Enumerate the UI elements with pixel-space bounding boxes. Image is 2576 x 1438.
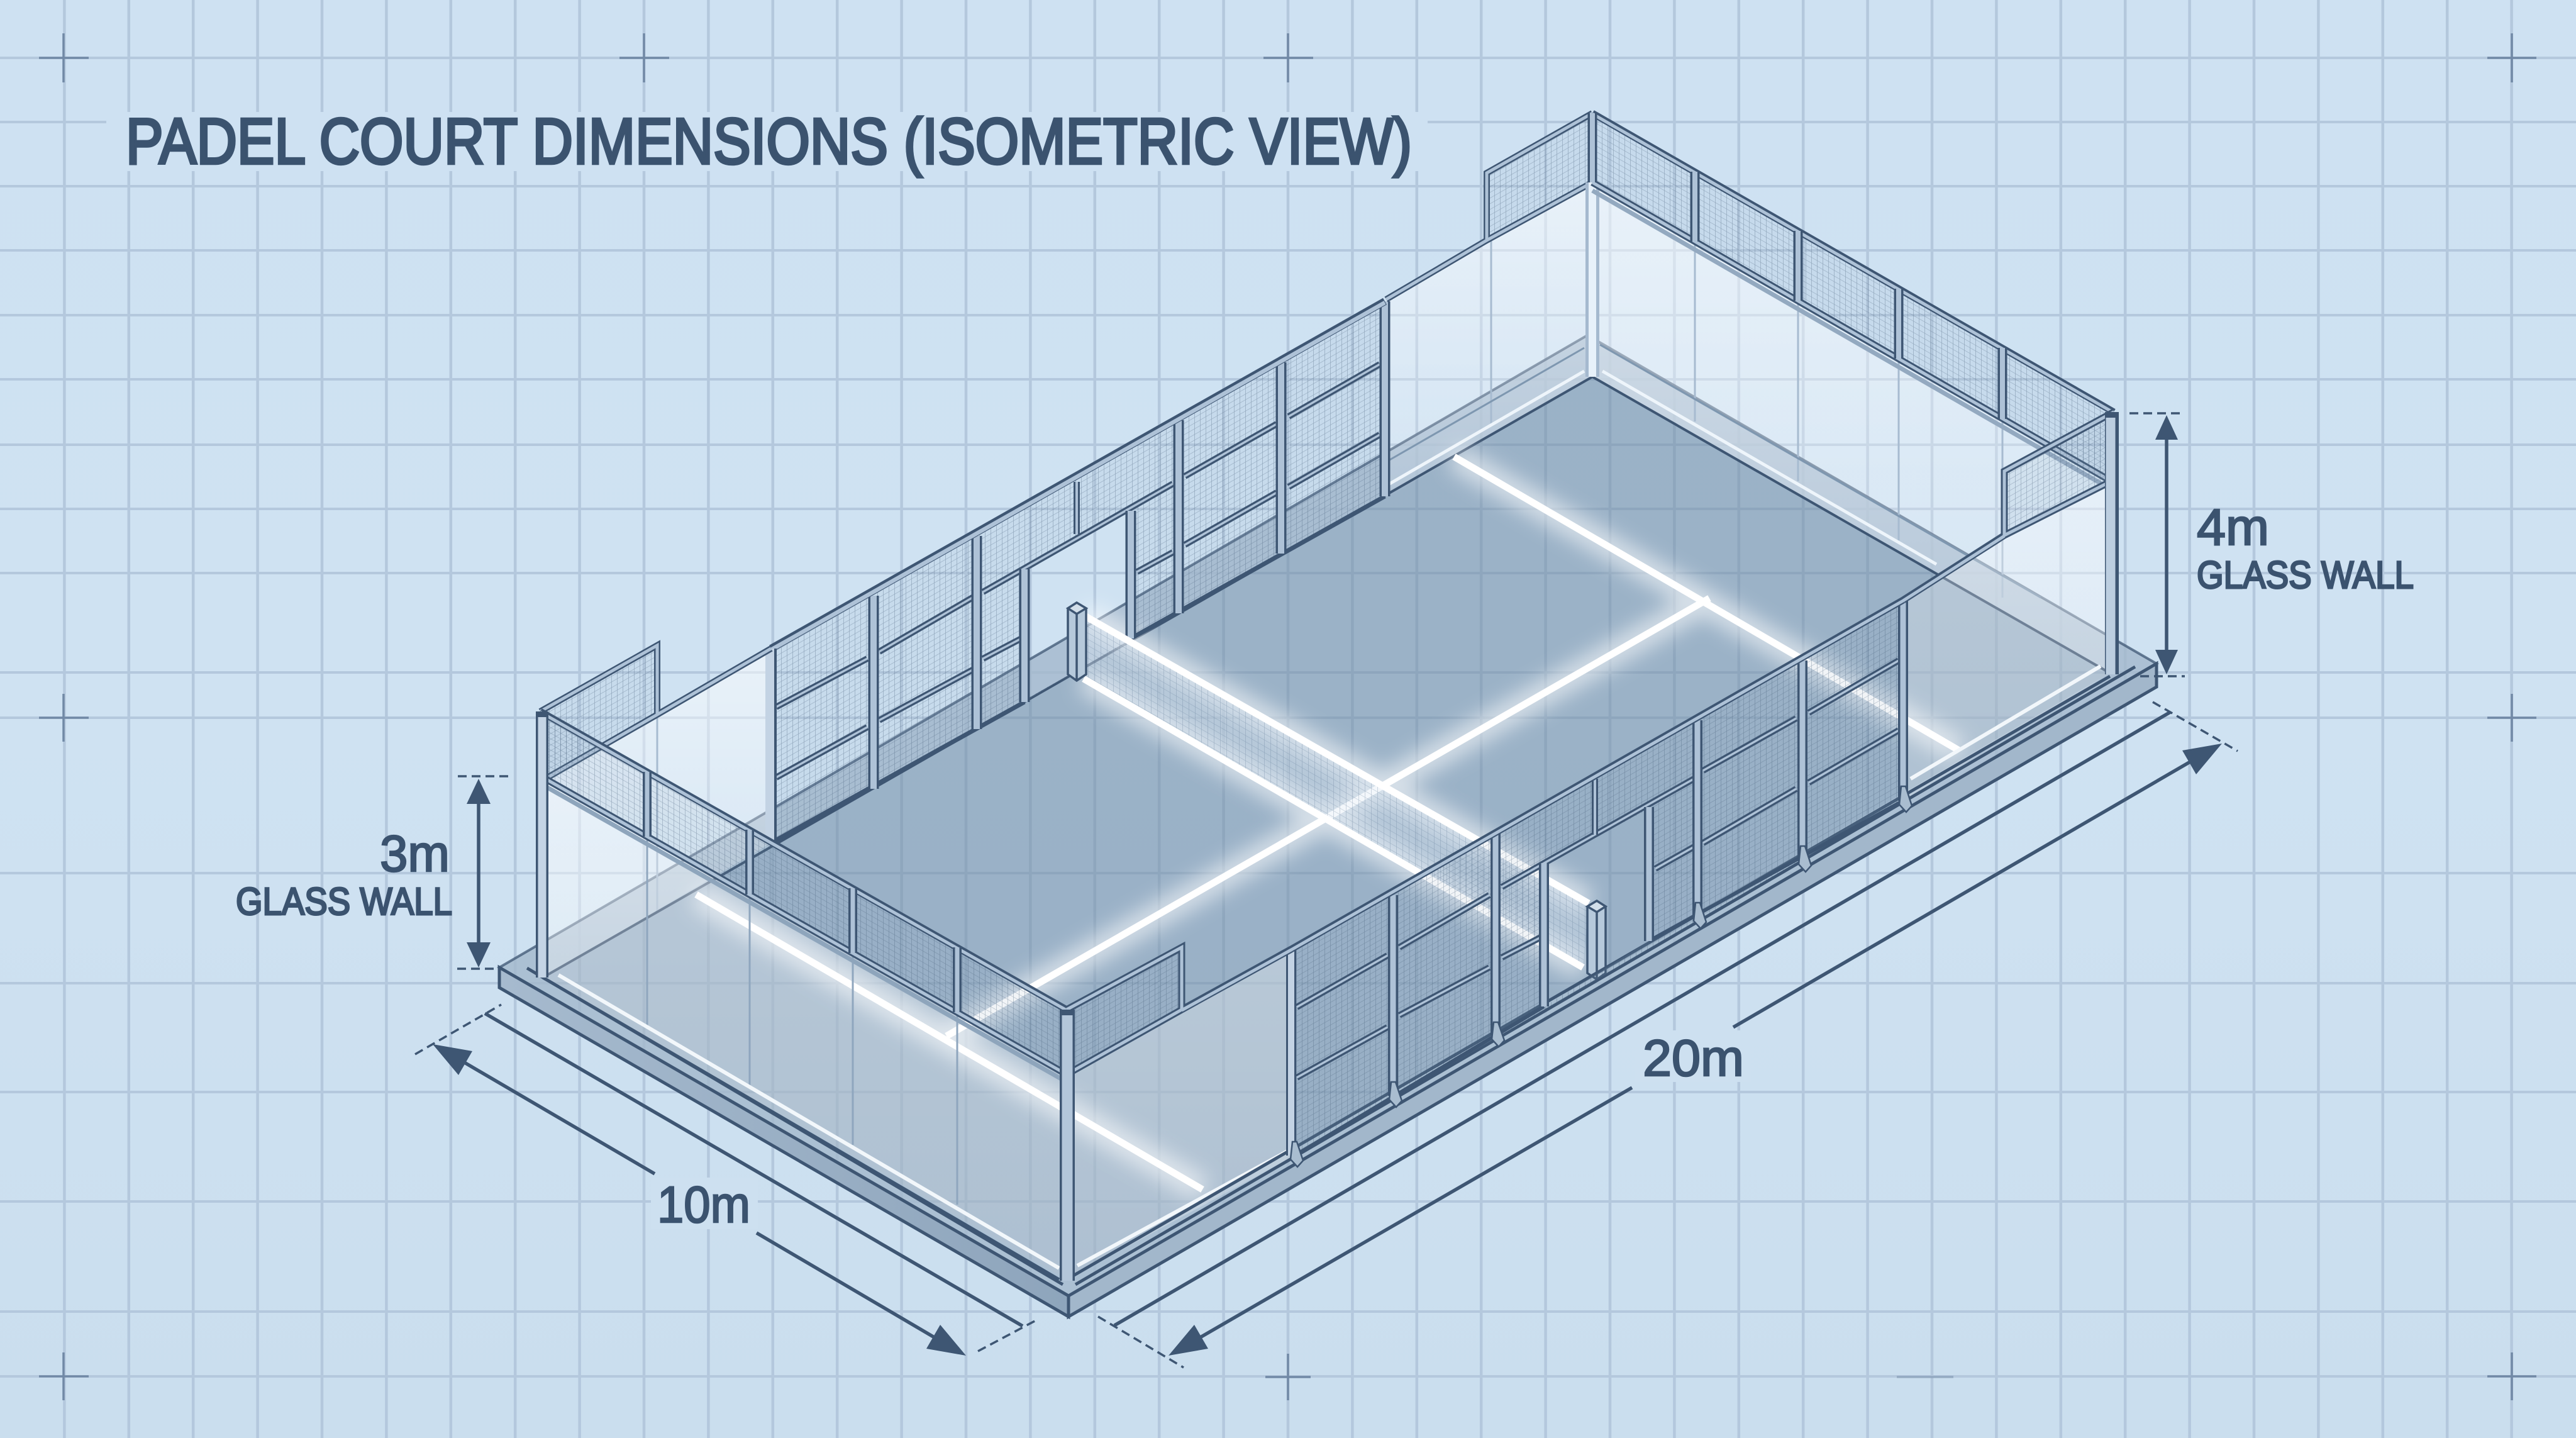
- door lintel post highlight: [1594, 779, 1596, 835]
- 10m value background: [651, 1178, 758, 1229]
- front-left sill lines: [558, 975, 1059, 1268]
- left corner pillar: [536, 711, 548, 978]
- glass post edge: [774, 649, 777, 843]
- end wall posts dark: [1592, 113, 2002, 419]
- far net post: [1068, 603, 1086, 681]
- long wall frame dark: [1297, 660, 1899, 1078]
- front corner pillar: [1060, 1010, 1075, 1281]
- glass panel divider lines: [657, 240, 2002, 912]
- far fence posts highlights: [874, 301, 1385, 789]
- service and centre lines: [696, 457, 1959, 1190]
- 4m extension lines: [2129, 413, 2185, 676]
- long wall sill white lines: [1077, 666, 2101, 1266]
- right corner pillar face: [2106, 418, 2116, 674]
- far fence frame dark: [776, 364, 1380, 778]
- back glass walls: [543, 182, 2111, 978]
- glass: back-left wall near apex: [1386, 182, 1592, 499]
- far fence top rail: [771, 301, 1385, 649]
- long wall top rails dark: [1067, 412, 2114, 1074]
- 10m arrow: [433, 1044, 966, 1356]
- long wall sill dark line: [1067, 667, 2135, 1285]
- far fence top rail highlight: [771, 303, 1385, 650]
- front-left mesh: [540, 711, 1067, 1074]
- front-left glass divider lines: [647, 837, 957, 1205]
- 3m extension lines: [457, 776, 513, 969]
- long wall mesh: [1291, 600, 1903, 1156]
- net mesh: [1084, 615, 1589, 967]
- back-left wall mesh fence: [770, 301, 1385, 843]
- front-left frame dark: [540, 711, 1067, 1074]
- dimension: 10m width: [415, 1005, 1038, 1356]
- 3m label: GLASS WALL: [236, 880, 452, 923]
- glass post at left of fence: [765, 649, 774, 843]
- front-left rail shadow: [545, 786, 1067, 1082]
- end wall frame dark: [1592, 113, 2114, 481]
- post feet: [1291, 786, 1912, 1167]
- far fence bottom rail: [771, 496, 1385, 843]
- platform right side face: [1069, 664, 2157, 1317]
- platform top outline: [499, 335, 2157, 1296]
- 20m value: 20m: [1643, 1030, 1744, 1087]
- long wall posts dark: [1291, 600, 1903, 1156]
- pale apex glass pillar highlight: [1589, 182, 1596, 377]
- title background knock-out: [106, 112, 1428, 171]
- end rails dark: [540, 113, 1592, 779]
- net top and base lines: [1084, 615, 1589, 967]
- front-left sill dark line: [527, 968, 1063, 1285]
- front-left posts highlight: [647, 772, 957, 1012]
- far fence frame highlights: [776, 364, 1380, 778]
- front corner pillar face: [1062, 1015, 1073, 1281]
- 3m double arrow: [467, 779, 491, 967]
- tennis net: [1068, 603, 1589, 967]
- long wall mesh wing near front corner: [1067, 947, 1182, 1074]
- front-left frame highlight: [540, 712, 1067, 1074]
- back-left wall end sections: [540, 113, 1592, 779]
- title: PADEL COURT DIMENSIONS (ISOMETRIC VIEW): [126, 105, 1412, 177]
- glass: back-left wall near left corner: [543, 649, 771, 978]
- platform left side face: [499, 967, 1069, 1317]
- left corner pillar face: [538, 717, 546, 978]
- end wall posts highlight: [1592, 113, 2002, 419]
- end wall mesh: [1592, 113, 2114, 481]
- far fence posts dark: [874, 301, 1385, 789]
- door lintel post highlight: [1075, 482, 1078, 534]
- front-left posts dark: [647, 772, 957, 1012]
- end wall frame highlight: [1592, 114, 2114, 481]
- right corner pillar: [2105, 412, 2119, 674]
- 10m reference line: [485, 1013, 1023, 1326]
- floor edge lines: [543, 345, 2110, 978]
- front-right long wall: [1067, 412, 2135, 1285]
- dimension: 3m height: [236, 776, 513, 969]
- end rails highlight: [540, 113, 1592, 779]
- corner pillars: [542, 412, 2112, 1281]
- front-left glass panel: [543, 779, 1067, 1279]
- dimension: 20m length: [1098, 702, 2238, 1368]
- mesh wing at left corner: [540, 645, 657, 779]
- far glass section: [1903, 481, 2111, 801]
- long wall mesh wing near right corner: [2004, 412, 2114, 535]
- 20m extension lines: [1098, 702, 2238, 1368]
- 4m double arrow: [2155, 415, 2178, 674]
- court lines: [696, 457, 1959, 1190]
- 4m value: 4m: [2197, 499, 2269, 556]
- dimension: 4m height: [2129, 413, 2414, 676]
- 20m value background: [1635, 1030, 1751, 1082]
- back-right end wall mesh: [1592, 113, 2114, 489]
- court floor: [543, 377, 2110, 1279]
- 10m extension lines: [415, 1005, 1038, 1351]
- court line glow: [696, 457, 1959, 1190]
- long wall bottom rail: [1295, 801, 1903, 1156]
- near glass section: [1067, 949, 1295, 1279]
- fence mesh: [771, 301, 1385, 843]
- 3m value: 3m: [380, 825, 450, 883]
- glass: back-right end wall: [1592, 182, 2111, 673]
- near net post: [1587, 901, 1606, 979]
- 20m reference line: [1114, 712, 2170, 1325]
- 20m arrow: [1169, 744, 2222, 1356]
- 10m value: 10m: [657, 1176, 750, 1234]
- long wall top rails highlight: [1067, 412, 2114, 1074]
- glass post at near end of fence: [1288, 950, 1294, 1156]
- platform top surface: [499, 335, 2157, 1296]
- front-left end wall: [527, 711, 1067, 1285]
- base platform: [499, 335, 2157, 1317]
- pale apex glass pillar: [1585, 182, 1599, 377]
- 4m label: GLASS WALL: [2197, 554, 2414, 596]
- mesh wing at apex: [1487, 113, 1592, 240]
- door lintel post: [1592, 779, 1598, 835]
- long wall frame highlight: [1297, 660, 1899, 1078]
- door lintel post: [1074, 482, 1080, 534]
- end wall rail shadow: [1592, 191, 2111, 489]
- long wall posts highlight: [1393, 600, 1903, 1096]
